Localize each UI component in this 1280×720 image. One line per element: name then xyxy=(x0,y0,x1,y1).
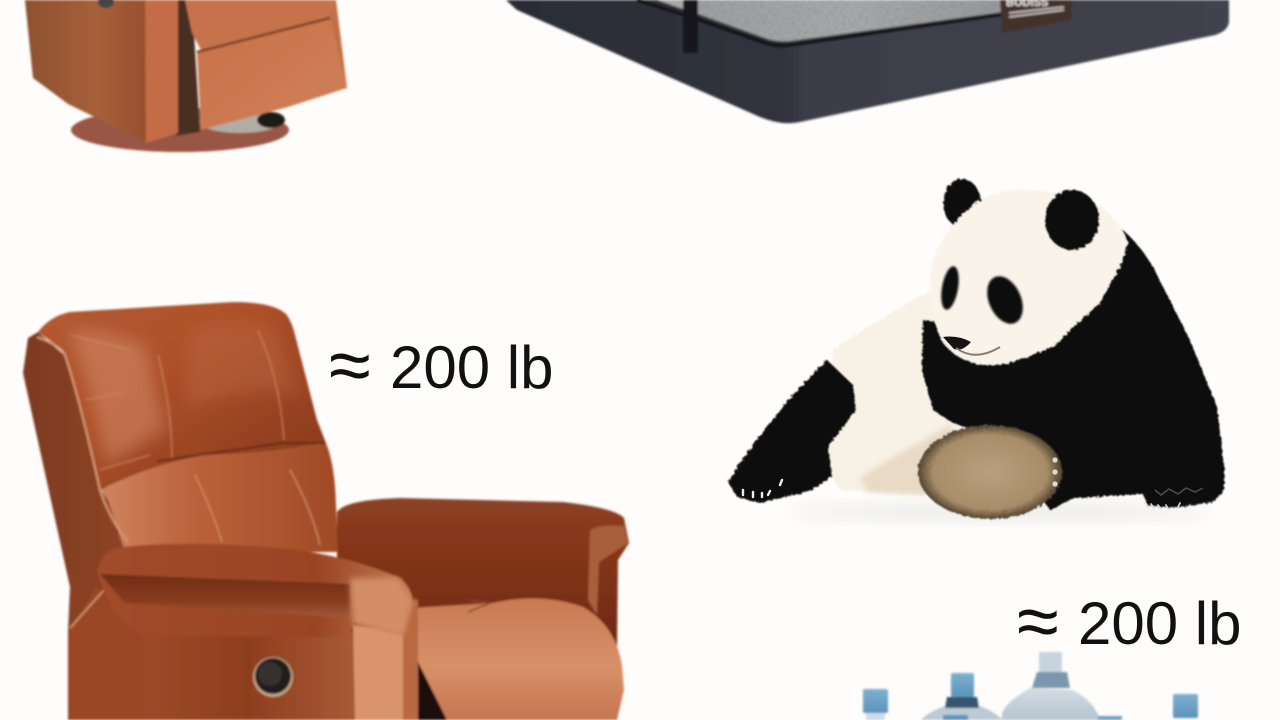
leg claws xyxy=(743,480,782,497)
back centre bottle xyxy=(1002,688,1100,720)
side button xyxy=(98,0,114,8)
ground shadow xyxy=(790,503,1210,521)
left ear xyxy=(943,179,981,227)
side panel xyxy=(25,0,146,142)
cream leg fur xyxy=(860,425,960,495)
headrest xyxy=(38,302,326,490)
nose and mouth xyxy=(943,337,971,350)
icon: panda xyxy=(728,179,1224,521)
lower seat front xyxy=(197,18,347,130)
paw claws xyxy=(1052,457,1058,463)
eye patches xyxy=(938,265,962,311)
far left bottle cap xyxy=(863,689,888,713)
icon: large leather recliner xyxy=(23,302,629,720)
arm top xyxy=(97,544,412,637)
seat xyxy=(412,598,624,720)
side wing xyxy=(23,332,135,587)
white rear body xyxy=(825,290,960,495)
rear foot claws xyxy=(1145,502,1180,509)
icon: water bottles xyxy=(863,652,1198,720)
label: water bottles weight: 200 lb xyxy=(1078,590,1241,657)
arm end highlight xyxy=(350,578,412,636)
front paw xyxy=(918,425,1062,519)
rear foot texture xyxy=(1155,488,1203,495)
left bottle xyxy=(921,706,1003,720)
arm band xyxy=(100,574,350,618)
lumbar seams xyxy=(157,443,325,545)
light panel xyxy=(353,625,403,720)
icon: mattress xyxy=(506,0,1229,123)
mattress base xyxy=(506,0,1229,123)
brand label xyxy=(1000,0,1072,33)
strap xyxy=(683,0,698,53)
lower cushion xyxy=(100,443,338,552)
piping xyxy=(37,337,128,542)
headrest seams xyxy=(70,330,284,470)
label: recliner weight: ≈ xyxy=(329,323,371,408)
label: water bottles weight: ≈ xyxy=(1017,579,1059,664)
back leg xyxy=(728,360,856,503)
right ear xyxy=(1045,190,1099,250)
near arm backing xyxy=(68,566,418,720)
upper seat front xyxy=(185,0,335,50)
main black body xyxy=(922,230,1224,510)
icon: small swivel recliner xyxy=(25,0,347,152)
swivel base xyxy=(71,108,289,152)
recline knob xyxy=(253,657,293,697)
foam layer xyxy=(698,0,1004,41)
dark gap xyxy=(176,0,200,136)
near arm front panel xyxy=(143,632,355,720)
black seam xyxy=(637,0,1004,46)
front stripe xyxy=(145,0,178,143)
far right bottle cap xyxy=(1173,694,1198,718)
foam left of strap xyxy=(657,0,683,9)
small front cap xyxy=(1098,716,1122,720)
far arm xyxy=(337,498,629,650)
label: recliner weight: 200 lb xyxy=(390,334,553,401)
head xyxy=(930,190,1128,365)
back right edge xyxy=(322,0,347,92)
